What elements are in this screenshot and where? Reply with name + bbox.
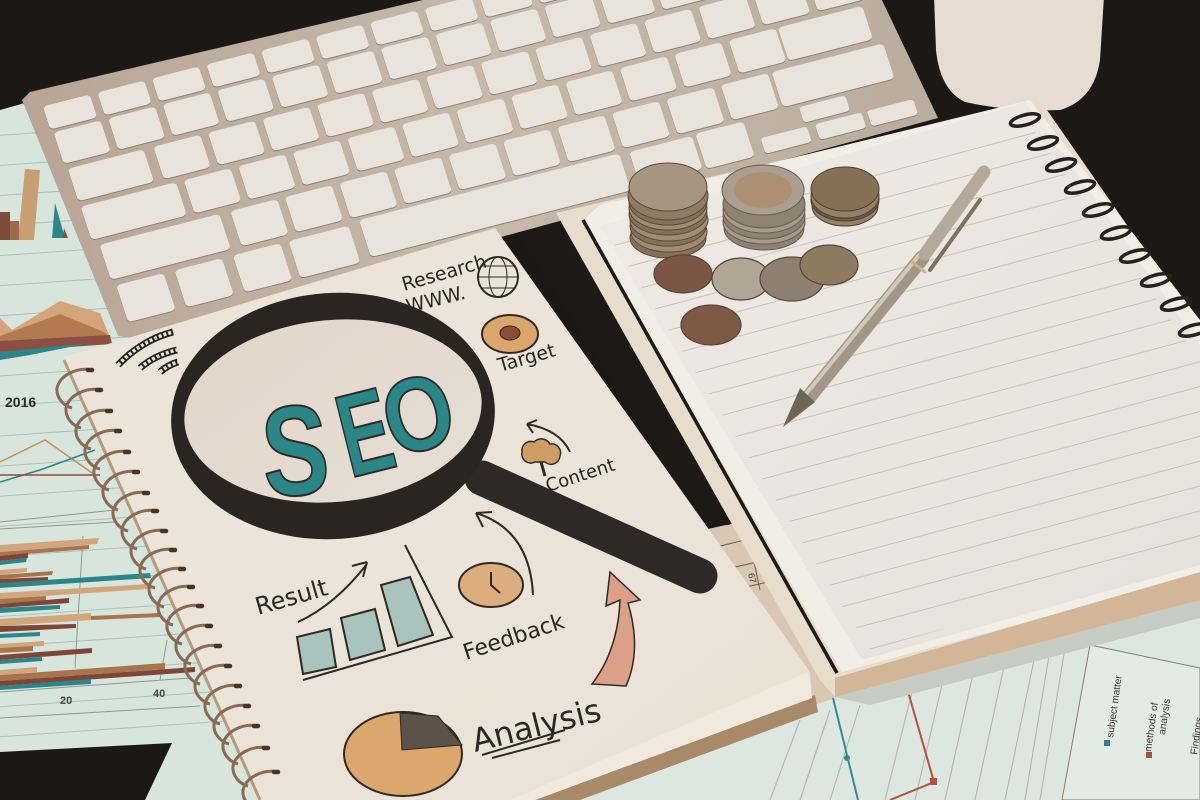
pen upper barrel <box>925 172 984 254</box>
notebook page <box>63 228 812 800</box>
result arrow <box>298 562 367 622</box>
brown back cover <box>535 695 818 800</box>
handle <box>482 478 700 576</box>
magnifying glass <box>163 282 700 576</box>
pen clip <box>930 200 980 270</box>
lined page stack <box>583 100 1200 672</box>
legend card: methods of <box>1143 702 1161 752</box>
analysis underline <box>482 730 565 758</box>
keyboard <box>22 0 938 338</box>
feedback label: Feedback <box>460 609 568 666</box>
coins <box>628 163 879 345</box>
spine strip <box>64 360 260 800</box>
coin stack 1 <box>628 163 708 258</box>
www label: WWW. <box>404 282 468 318</box>
table paper patch <box>703 520 838 705</box>
axis lines <box>0 510 200 718</box>
SEO lettering: S <box>257 378 333 525</box>
feedback arrow <box>476 512 533 595</box>
spiral binding <box>57 369 278 800</box>
teal trend line <box>833 698 858 800</box>
bottom right chart paper <box>565 520 1200 800</box>
red trend line <box>890 688 937 800</box>
page stack edge <box>510 672 812 800</box>
coin stack 2 <box>722 165 805 250</box>
left chart paper <box>0 103 300 800</box>
silver pen <box>783 172 984 427</box>
axis numbers <box>60 688 165 707</box>
left spiral notebook <box>57 228 818 800</box>
pen tip <box>783 388 815 427</box>
legend card <box>1062 645 1200 800</box>
year label: 2016 <box>5 394 36 410</box>
pen barrel highlight <box>806 254 920 394</box>
bar chart sketch <box>297 545 452 680</box>
pen band <box>912 262 925 272</box>
brown column chart <box>0 169 68 240</box>
coin stack 3 <box>811 167 879 226</box>
line chart <box>0 440 100 482</box>
horizontal bars <box>0 538 195 690</box>
research label: Research <box>399 251 489 296</box>
target label: Target <box>494 339 558 377</box>
lens rim <box>163 282 503 550</box>
lens glass <box>177 307 489 515</box>
dark gap between notebooks <box>520 222 730 525</box>
analysis label: Analysis <box>468 691 605 760</box>
SEO lettering: E <box>324 363 406 503</box>
area chart <box>0 301 112 360</box>
keyboard keys <box>43 0 920 326</box>
icon: clock <box>459 563 523 607</box>
table paper patch: 67 <box>746 572 758 584</box>
top page <box>600 102 1200 660</box>
pen shadow side <box>808 258 922 398</box>
wireless mouse <box>934 0 1104 110</box>
black spiral binding <box>1009 111 1200 339</box>
icon: globe <box>478 257 518 297</box>
notebook cover edge <box>556 100 1200 697</box>
icon: target <box>482 315 538 353</box>
axis numbers: 20 <box>60 695 72 707</box>
arrow to content <box>527 420 570 452</box>
axis numbers: 40 <box>153 688 165 700</box>
legend card: subject matter <box>1105 674 1125 738</box>
SEO lettering: O <box>369 348 467 480</box>
right notebook <box>556 100 1200 705</box>
pie chart <box>344 712 462 796</box>
result label: Result <box>252 573 331 621</box>
icon: wifi corner <box>118 332 178 372</box>
black line at page edge <box>583 220 837 673</box>
ruled lines <box>612 118 1200 650</box>
keyboard body <box>22 0 938 338</box>
SEO lettering <box>257 348 467 525</box>
page thickness bottom <box>835 572 1200 705</box>
content label: Content <box>543 455 618 497</box>
legend card: analysis <box>1157 698 1173 735</box>
salmon arrow <box>592 572 640 686</box>
loose coins <box>654 245 858 345</box>
icon: tree <box>522 439 561 476</box>
